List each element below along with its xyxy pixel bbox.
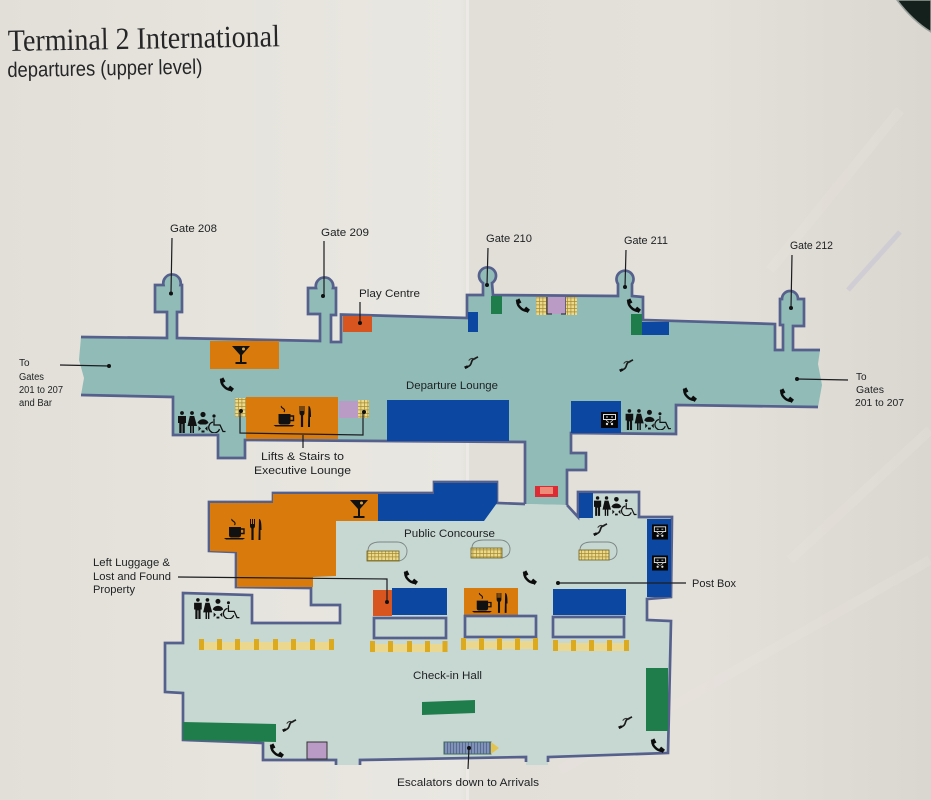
kiosk 2 xyxy=(471,540,510,558)
leader lines xyxy=(60,238,848,769)
label: lifts and stairs: Lifts & Stairs to xyxy=(261,451,344,463)
icons: bar xyxy=(232,346,368,518)
stairs left xyxy=(235,398,246,417)
label: to gates right: 201 to 207 xyxy=(855,398,904,409)
blue unit by toilets xyxy=(579,493,593,518)
label: public concourse: Public Concourse xyxy=(404,528,495,540)
icons: cash machines xyxy=(601,412,668,571)
escalator xyxy=(444,742,499,754)
label: to gates right: To xyxy=(856,372,867,383)
label: to gates left: and Bar xyxy=(19,398,53,409)
label: left luggage: Property xyxy=(93,584,135,596)
barrier rail 4 xyxy=(553,640,627,651)
title: Terminal 2 International xyxy=(8,18,280,58)
green unit right xyxy=(646,668,668,731)
icons: hearing loop xyxy=(282,357,633,732)
labels: gates: Gate 212 xyxy=(790,240,833,252)
green unit centre xyxy=(422,700,475,715)
blue shop xyxy=(378,483,497,521)
title: departures (upper level) xyxy=(7,56,203,82)
panel: public concourse and check-in hall floor xyxy=(165,482,672,765)
labels: gates: Gate 210 xyxy=(486,233,532,245)
check-in island 1 xyxy=(374,618,446,638)
label: to gates right xyxy=(855,372,904,409)
label: to gates left: Gates xyxy=(19,372,44,383)
label: play centre: Play Centre xyxy=(359,288,420,300)
left luggage unit xyxy=(373,590,392,616)
lift lower xyxy=(307,742,327,759)
red seat xyxy=(535,486,558,497)
labels: gates: Gate 209 xyxy=(321,227,369,239)
blue unit by fold xyxy=(468,312,478,332)
stairs right xyxy=(358,400,369,418)
shop block xyxy=(387,400,509,441)
bar unit xyxy=(210,341,279,369)
leader dots xyxy=(107,283,799,750)
blue unit with cash machine xyxy=(571,401,621,433)
icons: telephones xyxy=(220,298,794,758)
check-in island 2 xyxy=(465,616,536,637)
label: lifts and stairs xyxy=(254,451,351,477)
barrier rail 1 xyxy=(199,639,334,650)
kiosk 1 xyxy=(367,542,407,561)
check-in island 3 xyxy=(553,617,624,637)
check-in desk blue 3 xyxy=(553,589,626,615)
cafe unit xyxy=(246,397,338,439)
stairs and lift by gate 210 xyxy=(536,297,577,315)
label: lifts and stairs: Executive Lounge xyxy=(254,465,351,477)
icons: toilets and accessible facilities xyxy=(178,409,671,619)
label: to gates right: Gates xyxy=(856,385,884,396)
icons: cafe and dining xyxy=(224,406,508,613)
green unit gate 210 xyxy=(491,296,502,314)
panel: departure lounge floor xyxy=(79,267,822,505)
label: departure lounge: Departure Lounge xyxy=(406,380,498,392)
restaurant unit xyxy=(210,494,378,587)
blue unit gate 211 xyxy=(642,322,669,335)
check-in desk blue 1 xyxy=(392,588,447,615)
label: to gates left: 201 to 207 xyxy=(19,385,63,396)
green unit gate 211 xyxy=(631,314,642,335)
label: left luggage: Left Luggage & xyxy=(93,557,171,569)
labels: gates xyxy=(170,223,833,252)
dark object in top right corner xyxy=(897,0,931,32)
lift xyxy=(339,401,358,418)
title xyxy=(7,18,281,82)
play centre unit xyxy=(343,316,372,332)
kiosk 3 xyxy=(579,542,617,560)
cafe unit centre xyxy=(464,588,518,615)
label: to gates left xyxy=(19,358,63,409)
label: escalators: Escalators down to Arrivals xyxy=(397,777,540,789)
labels: gates: Gate 208 xyxy=(170,223,217,235)
barrier rail 3 xyxy=(461,638,538,650)
label: left luggage: Lost and Found xyxy=(93,571,171,583)
green unit lower left xyxy=(183,722,276,742)
labels: gates: Gate 211 xyxy=(624,235,668,247)
barrier rail 2 xyxy=(370,641,447,652)
blue column xyxy=(647,519,671,597)
label: to gates left: To xyxy=(19,358,30,369)
label: check-in hall: Check-in Hall xyxy=(413,670,482,682)
label: post box: Post Box xyxy=(692,578,736,590)
label: left luggage xyxy=(93,557,171,596)
